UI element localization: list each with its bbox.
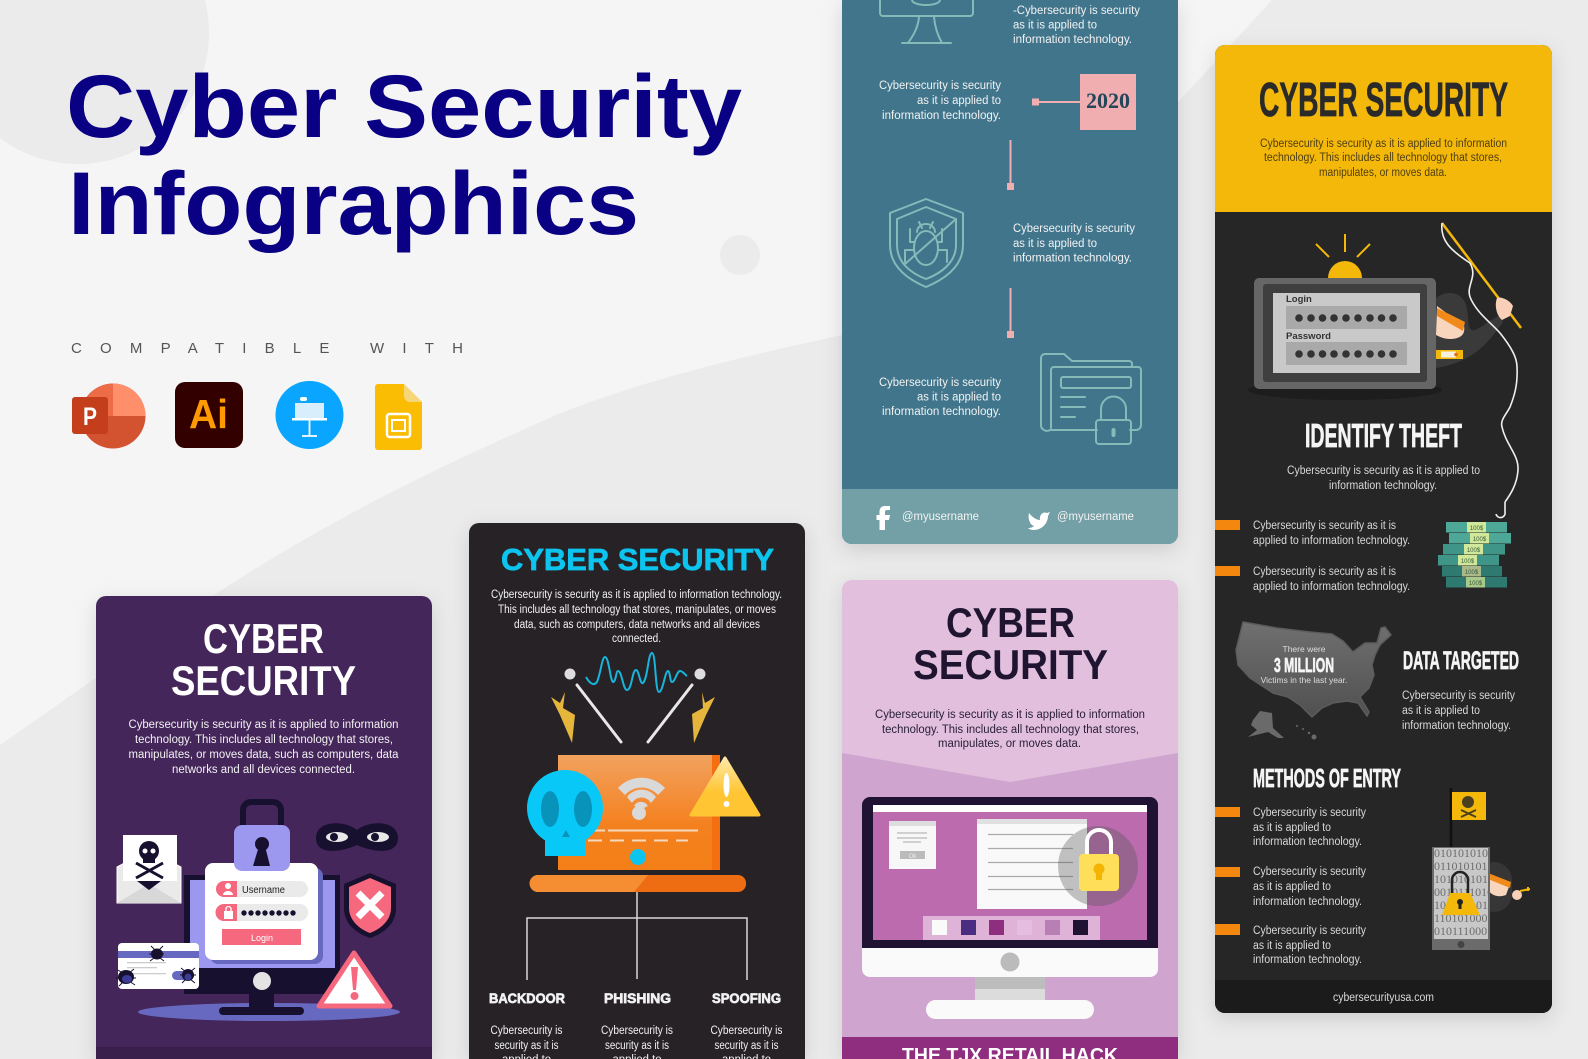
timeline text 2: Cybersecurity is security: [879, 80, 1001, 92]
icon: Illustrator: Ai: [189, 391, 228, 437]
map callout: There were: [1282, 644, 1326, 654]
method item 2: as it is applied to: [1253, 881, 1331, 893]
illustration: hacked phone with pirate flag: [1432, 788, 1530, 950]
icon: Google Slides: [375, 384, 422, 450]
timeline text 4: Cybersecurity is security: [879, 377, 1001, 389]
purple body text: technology. This includes all technology that stores,: [135, 734, 393, 746]
timeline text 3: as it is applied to: [1013, 238, 1097, 250]
twitter handle: @myusername: [1057, 511, 1134, 523]
list item 2: applied to information technology.: [1253, 581, 1410, 593]
method item 2: [1215, 866, 1366, 908]
illustration: desktop monitor with lock: [862, 797, 1158, 1019]
illustration: computer login with threats: Username: [242, 885, 285, 896]
purple heading: SECURITY: [171, 657, 356, 704]
column: spoofing: SPOOFING: [712, 990, 781, 1006]
dialog window: [889, 821, 936, 869]
pink body text: technology. This includes all technology that stores,: [882, 724, 1139, 736]
method item 1: information technology.: [1253, 836, 1362, 848]
icon: Keynote: [276, 381, 344, 449]
column: phishing: PHISHING: [604, 990, 671, 1006]
pink body text: Cybersecurity is security as it is applied to information: [875, 709, 1145, 721]
pink body text: manipulates, or moves data.: [938, 738, 1081, 750]
binary text on phone: 0101110001: [1434, 924, 1493, 938]
yellow body text: manipulates, or moves data.: [1319, 167, 1447, 179]
map of the USA: [1236, 622, 1391, 740]
black card body text: Cybersecurity is security as it is applied to information technology.: [491, 589, 782, 601]
icon: facebook: [876, 506, 890, 530]
method item 3: as it is applied to: [1253, 940, 1331, 952]
icon: stack of money: 100$: [1465, 570, 1479, 576]
method item 3: information technology.: [1253, 954, 1362, 966]
yellow body text: Cybersecurity is security as it is applied to information: [1260, 138, 1507, 150]
icon: error shield: [344, 873, 396, 938]
icon: monitor outline: [880, 0, 973, 43]
black card body text: This includes all technology that stores, manipulates, or moves: [498, 604, 776, 616]
timeline text 2: information technology.: [882, 110, 1001, 122]
heading: identify theft: IDENTIFY THEFT: [1305, 417, 1462, 454]
icon: stack of money: 100$: [1473, 537, 1487, 543]
title: Cyber Security: [66, 56, 743, 156]
timeline connector 1: [1007, 140, 1014, 190]
year marker 2020: 2020: [1086, 88, 1130, 113]
column: phishing: Cybersecurity is: [601, 1025, 673, 1037]
column: spoofing: [710, 990, 783, 1059]
title: [66, 56, 743, 253]
method item 3: Cybersecurity is security: [1253, 925, 1366, 937]
method item 2: Cybersecurity is security: [1253, 866, 1366, 878]
timeline text 2: [879, 80, 1001, 122]
icon: poisoned email: [117, 835, 181, 903]
icon: PowerPoint: P: [83, 403, 97, 431]
pink body text: [875, 709, 1145, 750]
column: spoofing: security as it is: [714, 1040, 779, 1052]
purple footer band: [96, 1047, 432, 1059]
yellow header: [1215, 45, 1552, 212]
timeline text 4: information technology.: [882, 406, 1001, 418]
map callout: 3 MILLION: [1274, 655, 1334, 677]
timeline text 1: [1013, 5, 1140, 46]
tree connector: [527, 892, 747, 980]
teal footer with social handles: [842, 489, 1178, 544]
binary text on phone: 0010111010: [1434, 885, 1493, 899]
pink chevron background: [842, 753, 1178, 1059]
list item 1: [1215, 520, 1410, 547]
method item 3: [1215, 924, 1366, 966]
title: Infographics: [68, 153, 639, 253]
list item 2: Cybersecurity is security as it is: [1253, 566, 1396, 578]
black card body text: data, such as computers, data networks and all devices: [514, 619, 760, 631]
year marker 2020: [1032, 74, 1136, 130]
data targeted text: as it is applied to: [1402, 705, 1480, 717]
icon: locked folder: [1041, 354, 1141, 444]
panel: black cyber security poster: [469, 523, 805, 1059]
dialog window: Ok: [909, 854, 917, 860]
icon: PowerPoint: [72, 384, 146, 448]
dark card footer: cybersecurityusa.com: [1333, 992, 1434, 1004]
binary text on phone: 1010101011: [1434, 898, 1494, 912]
timeline text 3: information technology.: [1013, 252, 1132, 264]
pink heading: CYBER: [946, 599, 1075, 646]
method item 1: [1215, 807, 1366, 848]
panel: pink poster: [842, 580, 1178, 1059]
icon: shield with bug: [890, 199, 963, 287]
data targeted text: information technology.: [1402, 720, 1511, 732]
binary text on phone: 1101010001: [1434, 911, 1494, 925]
purple body text: networks and all devices connected.: [172, 764, 355, 776]
purple body text: [128, 719, 399, 776]
illustration: login panel with alarm: [1248, 234, 1442, 400]
compatible with label: COMPATIBLE WITH: [71, 340, 463, 357]
yellow body text: [1260, 138, 1507, 179]
timeline text 1: as it is applied to: [1013, 20, 1097, 32]
icon: mask: [316, 823, 398, 851]
binary text on phone: 1010101011: [1434, 872, 1494, 886]
column: backdoor: security as it is: [494, 1040, 559, 1052]
timeline connector 2: [1007, 288, 1014, 338]
icon: stack of money: 100$: [1467, 548, 1481, 554]
pink footer banner: [842, 1037, 1178, 1059]
dark card footer: [1215, 980, 1552, 1013]
identify theft text: Cybersecurity is security as it is applied to: [1287, 465, 1480, 477]
icon: twitter: [1028, 512, 1050, 530]
column: phishing: security as it is: [605, 1040, 669, 1052]
heading: methods of entry: METHODS OF ENTRY: [1253, 763, 1401, 793]
purple body text: Cybersecurity is security as it is applied to information: [128, 719, 398, 731]
icon: stack of money: 100$: [1461, 559, 1475, 565]
illustration: hacked laptop: [527, 755, 759, 892]
icon: warning triangle: [691, 758, 759, 815]
timeline text 3: Cybersecurity is security: [1013, 223, 1135, 235]
method item 2: information technology.: [1253, 896, 1362, 908]
yellow body text: technology. This includes all technology that stores,: [1264, 152, 1502, 164]
illustration: hacker with fishing rod: [1436, 223, 1521, 518]
panel: purple cyber security poster: [96, 596, 432, 1059]
identify theft text: information technology.: [1329, 480, 1437, 492]
column: backdoor: [489, 990, 565, 1059]
icon: stack of money: 100$: [1469, 581, 1483, 587]
icon: stack of money: 100$: [1470, 526, 1484, 532]
column: phishing: [601, 990, 673, 1059]
purple body text: manipulates, or moves data, such as computers, data: [128, 749, 399, 761]
icon: warning triangle: [319, 953, 390, 1006]
illustration: computer login with threats: [116, 802, 400, 1021]
purple heading: [171, 615, 356, 704]
method item 1: as it is applied to: [1253, 822, 1331, 834]
panel: teal timeline poster: [842, 0, 1178, 544]
timeline text 4: [879, 377, 1001, 418]
identify theft text: [1287, 465, 1480, 492]
black card body text: connected.: [612, 633, 661, 645]
map callout: [1261, 644, 1347, 685]
panel: dark and yellow poster: [1215, 45, 1552, 1013]
data targeted text: [1402, 690, 1515, 732]
black card heading: CYBER SECURITY: [501, 542, 774, 577]
column: backdoor: BACKDOOR: [489, 990, 565, 1006]
column: backdoor: Cybersecurity is: [490, 1025, 563, 1037]
black card body text: [491, 589, 782, 645]
pink heading: [913, 599, 1108, 688]
timeline text 2: as it is applied to: [917, 95, 1001, 107]
binary text on phone: 0101010101: [1434, 846, 1494, 860]
timeline text 3: [1013, 223, 1135, 264]
icon: Illustrator: [175, 382, 243, 448]
illustration: login panel with alarm: Password: [1286, 331, 1331, 342]
icon: credit card with bugs: [116, 943, 199, 989]
timeline text 1: -Cybersecurity is security: [1013, 5, 1140, 17]
timeline text 4: as it is applied to: [917, 392, 1001, 404]
icon: stack of money: [1438, 522, 1511, 588]
illustration: login panel with alarm: Login: [1286, 294, 1312, 305]
purple heading: CYBER: [203, 615, 324, 662]
list item 1: Cybersecurity is security as it is: [1253, 520, 1396, 532]
list item 2: [1215, 566, 1410, 593]
binary text on phone: 0110101010: [1434, 859, 1494, 873]
map callout: Victims in the last year.: [1261, 675, 1347, 685]
data targeted text: Cybersecurity is security: [1402, 690, 1515, 702]
binary text on phone: [1434, 850, 1488, 935]
icon: blue skull: [527, 770, 603, 856]
method item 1: Cybersecurity is security: [1253, 807, 1366, 819]
pink heading: SECURITY: [913, 641, 1108, 688]
illustration: computer login with threats: Login: [251, 933, 273, 943]
illustration: signal and lightning: [551, 653, 715, 743]
column: spoofing: Cybersecurity is: [710, 1025, 783, 1037]
timeline text 1: information technology.: [1013, 34, 1132, 46]
list item 1: applied to information technology.: [1253, 535, 1410, 547]
facebook handle: @myusername: [902, 511, 979, 523]
